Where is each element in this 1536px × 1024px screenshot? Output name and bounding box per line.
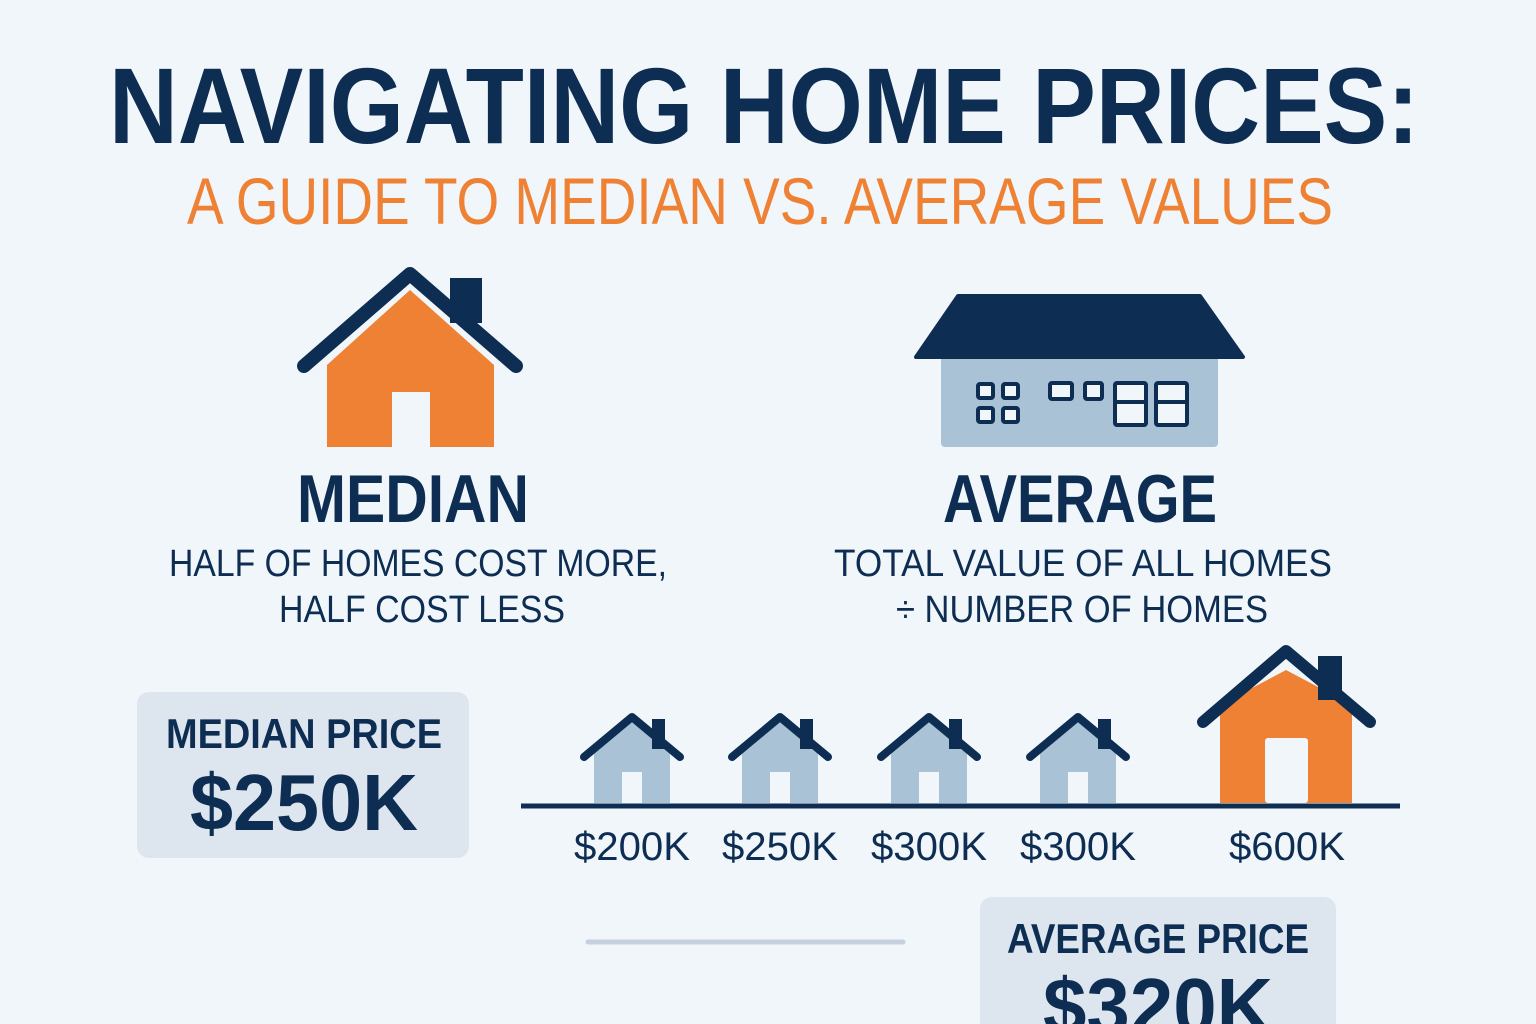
divider bar bbox=[588, 940, 903, 944]
heading: median: MEDIAN bbox=[297, 461, 529, 537]
text: median description: HALF COST LESS bbox=[279, 589, 565, 631]
icon: average house bbox=[916, 296, 1243, 447]
callout: median price: $250K bbox=[190, 758, 418, 847]
subtitle: A GUIDE TO MEDIAN VS. AVERAGE VALUES bbox=[187, 164, 1333, 238]
text: median description bbox=[169, 543, 667, 631]
text: median description: HALF OF HOMES COST MORE, bbox=[169, 543, 667, 585]
price labels: $300K bbox=[871, 825, 987, 869]
price labels bbox=[574, 825, 1345, 869]
icon: small house 2 bbox=[732, 717, 828, 803]
icon: small house 1 bbox=[584, 717, 680, 803]
callout: median price bbox=[137, 692, 469, 858]
icon: small house 3 bbox=[881, 717, 977, 803]
icon: big orange house bbox=[1203, 651, 1370, 803]
icon: median house bbox=[304, 274, 516, 448]
price labels: $250K bbox=[722, 825, 838, 869]
chart: house price row bbox=[521, 651, 1400, 869]
text: average description bbox=[834, 543, 1332, 631]
heading: average: AVERAGE bbox=[943, 461, 1217, 537]
callout: average price bbox=[980, 897, 1336, 1024]
price labels: $200K bbox=[574, 825, 690, 869]
price labels: $300K bbox=[1020, 825, 1136, 869]
text: average description: TOTAL VALUE OF ALL HOMES bbox=[834, 543, 1332, 585]
price labels: $600K bbox=[1229, 825, 1345, 869]
icon: small house 4 bbox=[1030, 717, 1126, 803]
text: average description: ÷ NUMBER OF HOMES bbox=[896, 589, 1268, 631]
callout: median price: MEDIAN PRICE bbox=[166, 710, 442, 757]
callout: average price: AVERAGE PRICE bbox=[1007, 915, 1309, 962]
